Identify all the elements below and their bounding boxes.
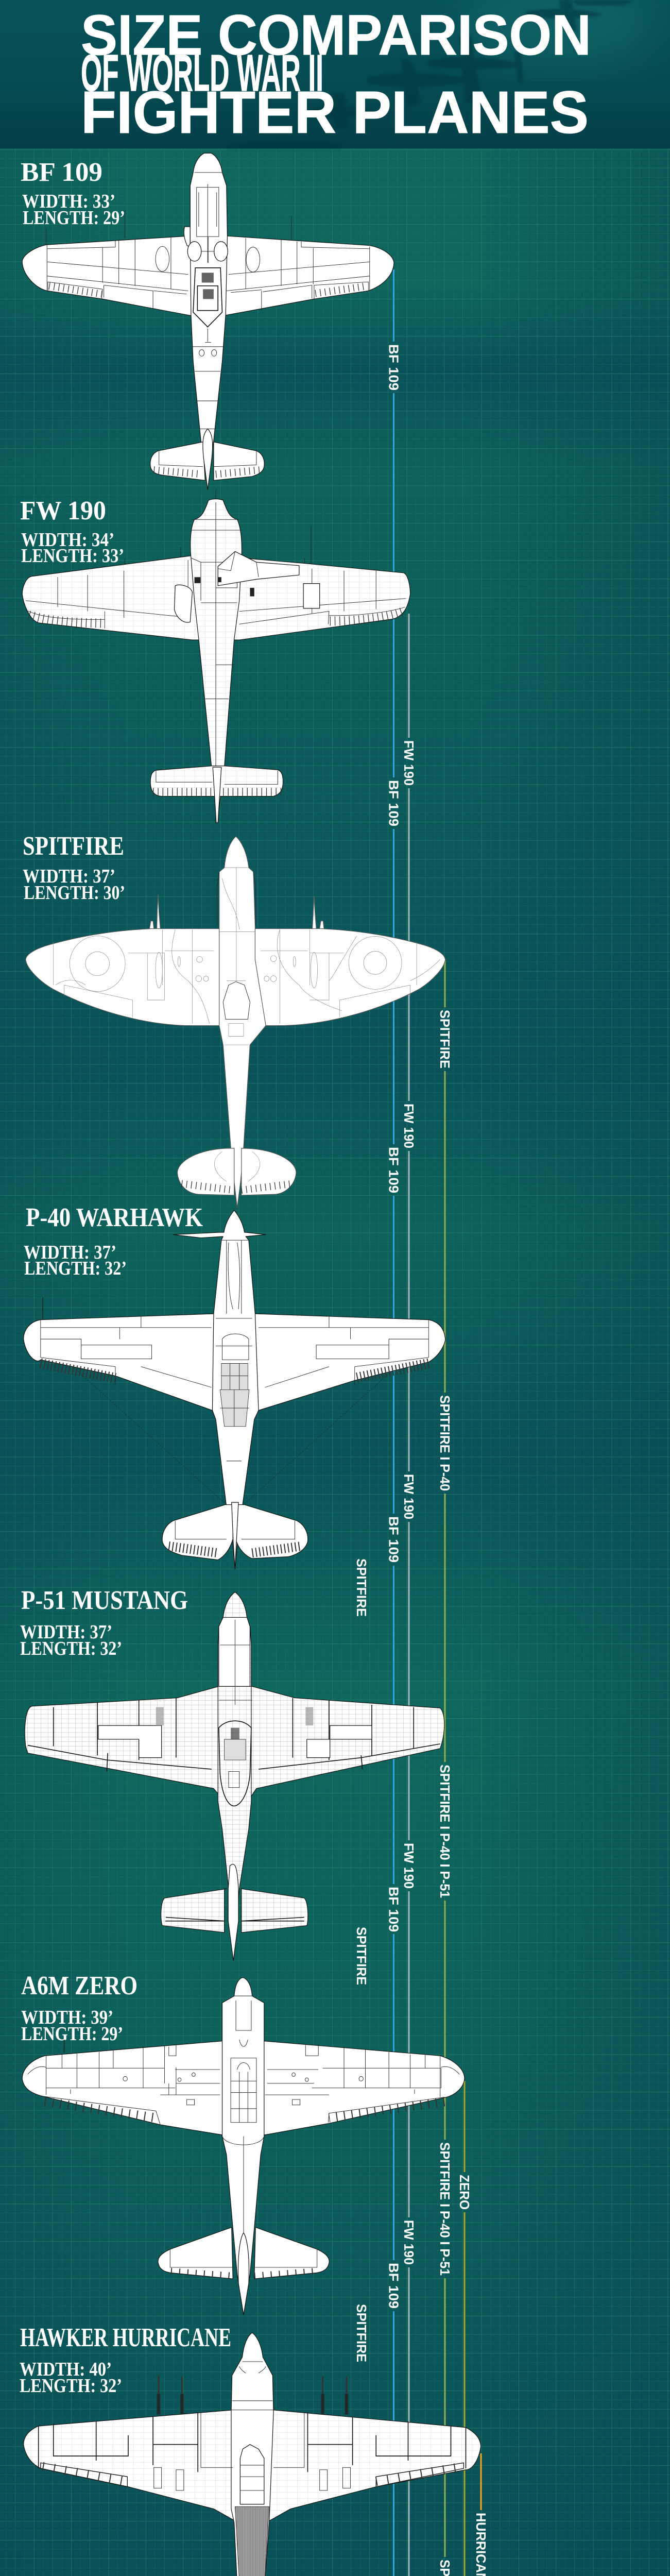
specs: Spitfire: WIDTH: 37’ xyxy=(23,866,115,887)
labels: Spitfire width markers: SPITFIRE xyxy=(354,1927,369,1985)
specs: FW 190: LENGTH: 33’ xyxy=(21,545,124,567)
plane: BF 109 top view xyxy=(22,153,394,489)
line: Spitfire, P-40, P-51: SPITFIRE I P-40 I P-51 xyxy=(437,1765,453,1898)
specs: FW 190 xyxy=(21,529,124,567)
specs: Hawker Hurricane xyxy=(20,2359,122,2397)
labels: Spitfire width markers: SPITFIRE xyxy=(354,2304,369,2362)
line: Zero: ZERO xyxy=(457,2175,472,2210)
plane: FW 190 top view xyxy=(22,489,410,823)
line: Spitfire, P-40, P-51: SPITFIRE I P-40 I P-51 xyxy=(437,2142,453,2276)
title xyxy=(81,4,591,146)
specs: Spitfire: LENGTH: 30’ xyxy=(24,882,125,904)
panel: FW 190 xyxy=(20,489,410,823)
line: BF 109: BF 109 xyxy=(386,1516,402,1563)
heading: Hawker Hurricane: HAWKER HURRICANE xyxy=(20,2323,231,2352)
panel: P-51 Mustang xyxy=(20,1586,444,1960)
line: FW 190: FW 190 xyxy=(401,1843,417,1889)
line: BF 109: BF 109 xyxy=(386,344,402,391)
specs: P-40 Warhawk: WIDTH: 37’ xyxy=(24,1242,116,1263)
heading: Spitfire: SPITFIRE xyxy=(23,832,124,861)
specs: Spitfire xyxy=(23,866,125,904)
specs: BF 109 xyxy=(22,191,125,229)
wingspan comparison lines xyxy=(354,269,507,2576)
specs: A6M Zero: WIDTH: 39’ xyxy=(21,2007,113,2028)
line: FW 190: FW 190 xyxy=(401,1474,417,1519)
panel: P-40 Warhawk xyxy=(24,1203,445,1569)
title: SIZE COMPARISON xyxy=(81,4,591,67)
heading: FW 190: FW 190 xyxy=(20,496,106,526)
line: FW 190: FW 190 xyxy=(401,1104,417,1148)
heading: A6M Zero: A6M ZERO xyxy=(21,1971,138,2001)
panel: BF 109 xyxy=(21,153,394,489)
header band with faded planes xyxy=(0,0,670,148)
panel: Spitfire xyxy=(23,832,445,1208)
specs: BF 109: LENGTH: 29’ xyxy=(23,207,125,229)
heading: P-51 Mustang: P-51 MUSTANG xyxy=(21,1586,188,1615)
plane: Spitfire top view xyxy=(26,836,445,1208)
line: BF 109: BF 109 xyxy=(386,2263,402,2309)
line: FW 190: FW 190 xyxy=(401,2220,417,2265)
specs: P-40 Warhawk: LENGTH: 32’ xyxy=(24,1258,127,1279)
line: Spitfire, P-40, P-51: SPITFIRE I P-40 xyxy=(437,1395,453,1491)
line: BF 109: BF 109 xyxy=(386,1147,402,1193)
panel: Hawker Hurricane xyxy=(20,2323,481,2576)
labels: Spitfire width markers: SPITFIRE xyxy=(354,1558,369,1617)
labels: Spitfire width markers xyxy=(354,1558,369,2576)
specs: Hawker Hurricane: LENGTH: 32’ xyxy=(20,2375,122,2397)
line: BF 109 xyxy=(386,269,402,2576)
heading: BF 109: BF 109 xyxy=(21,158,102,187)
specs: P-51 Mustang xyxy=(20,1621,122,1659)
plane: P-51 top view xyxy=(25,1592,444,1960)
specs: A6M Zero xyxy=(21,2007,123,2045)
title: OF WORLD WAR II xyxy=(81,44,323,102)
specs: P-51 Mustang: WIDTH: 37’ xyxy=(20,1621,112,1643)
line: BF 109: BF 109 xyxy=(386,780,402,826)
line: FW 190 xyxy=(401,614,417,2576)
plane: P-40 top view xyxy=(24,1210,445,1569)
title: FIGHTER PLANES xyxy=(81,79,589,146)
heading: P-40 Warhawk: P-40 WARHAWK xyxy=(26,1203,203,1232)
plane: A6M Zero top view xyxy=(22,1977,465,2315)
line: Spitfire, P-40, P-51: SPITFIRE xyxy=(437,1010,453,1069)
panel: A6M Zero xyxy=(21,1971,465,2315)
line: Spitfire, P-40, P-51 xyxy=(437,959,453,2576)
specs: BF 109: WIDTH: 33’ xyxy=(22,191,115,212)
specs: A6M Zero: LENGTH: 29’ xyxy=(21,2023,123,2045)
line: BF 109: BF 109 xyxy=(386,1887,402,1932)
specs: P-51 Mustang: LENGTH: 32’ xyxy=(20,1638,122,1659)
line: FW 190: FW 190 xyxy=(401,740,417,786)
specs: P-40 Warhawk xyxy=(24,1242,127,1279)
specs: Hawker Hurricane: WIDTH: 40’ xyxy=(20,2359,112,2380)
plane: Hawker Hurricane top view xyxy=(24,2333,481,2576)
specs: FW 190: WIDTH: 34’ xyxy=(21,529,114,551)
